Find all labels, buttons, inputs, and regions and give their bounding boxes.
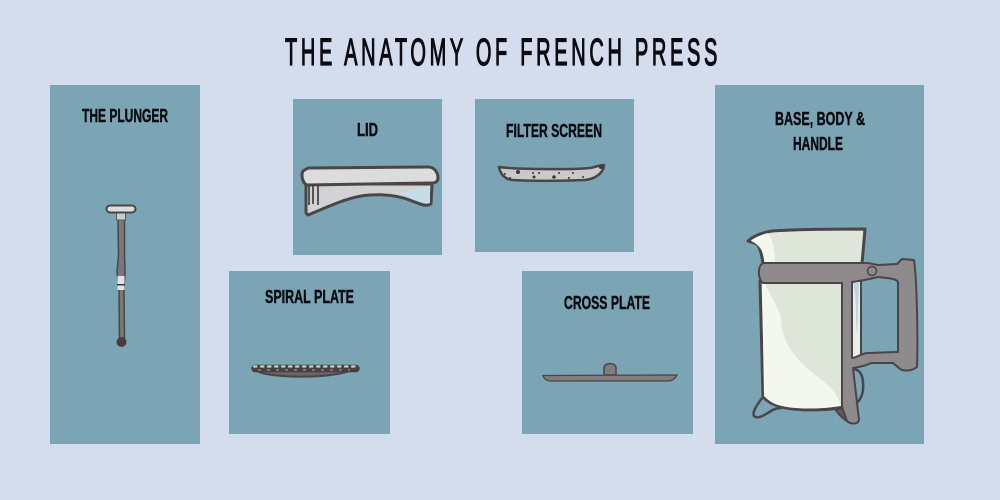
window behind handle — [851, 281, 861, 360]
heading: lid: LID — [357, 120, 378, 140]
heading: base, body and handle: HANDLE — [793, 134, 843, 154]
icon: lid — [302, 167, 438, 215]
heading: base, body and handle: BASE, BODY & — [775, 109, 865, 129]
heading: filter screen: FILTER SCREEN — [506, 121, 602, 141]
panel: base, body and handle — [715, 85, 924, 444]
glass body — [760, 281, 843, 410]
heading: spiral plate: SPIRAL PLATE — [265, 287, 354, 307]
frame and handle — [759, 259, 917, 424]
upper glass — [748, 229, 865, 264]
icon: plunger — [106, 206, 136, 347]
icon: french press jug — [748, 229, 917, 424]
filter holes — [504, 165, 603, 179]
screw — [868, 266, 876, 276]
icon: filter screen — [499, 165, 604, 181]
heading: base, body and handle — [775, 109, 865, 154]
icon: cross plate — [543, 364, 677, 381]
panel: spiral plate — [229, 271, 390, 434]
heading: cross plate: CROSS PLATE — [564, 293, 650, 313]
panel: lid — [293, 99, 442, 255]
heading: the plunger: THE PLUNGER — [82, 106, 168, 126]
feet — [754, 398, 782, 417]
icon: spiral plate — [254, 366, 358, 377]
panel: cross plate — [522, 271, 693, 434]
panel: the plunger — [50, 85, 200, 444]
panel: filter screen — [475, 99, 634, 252]
